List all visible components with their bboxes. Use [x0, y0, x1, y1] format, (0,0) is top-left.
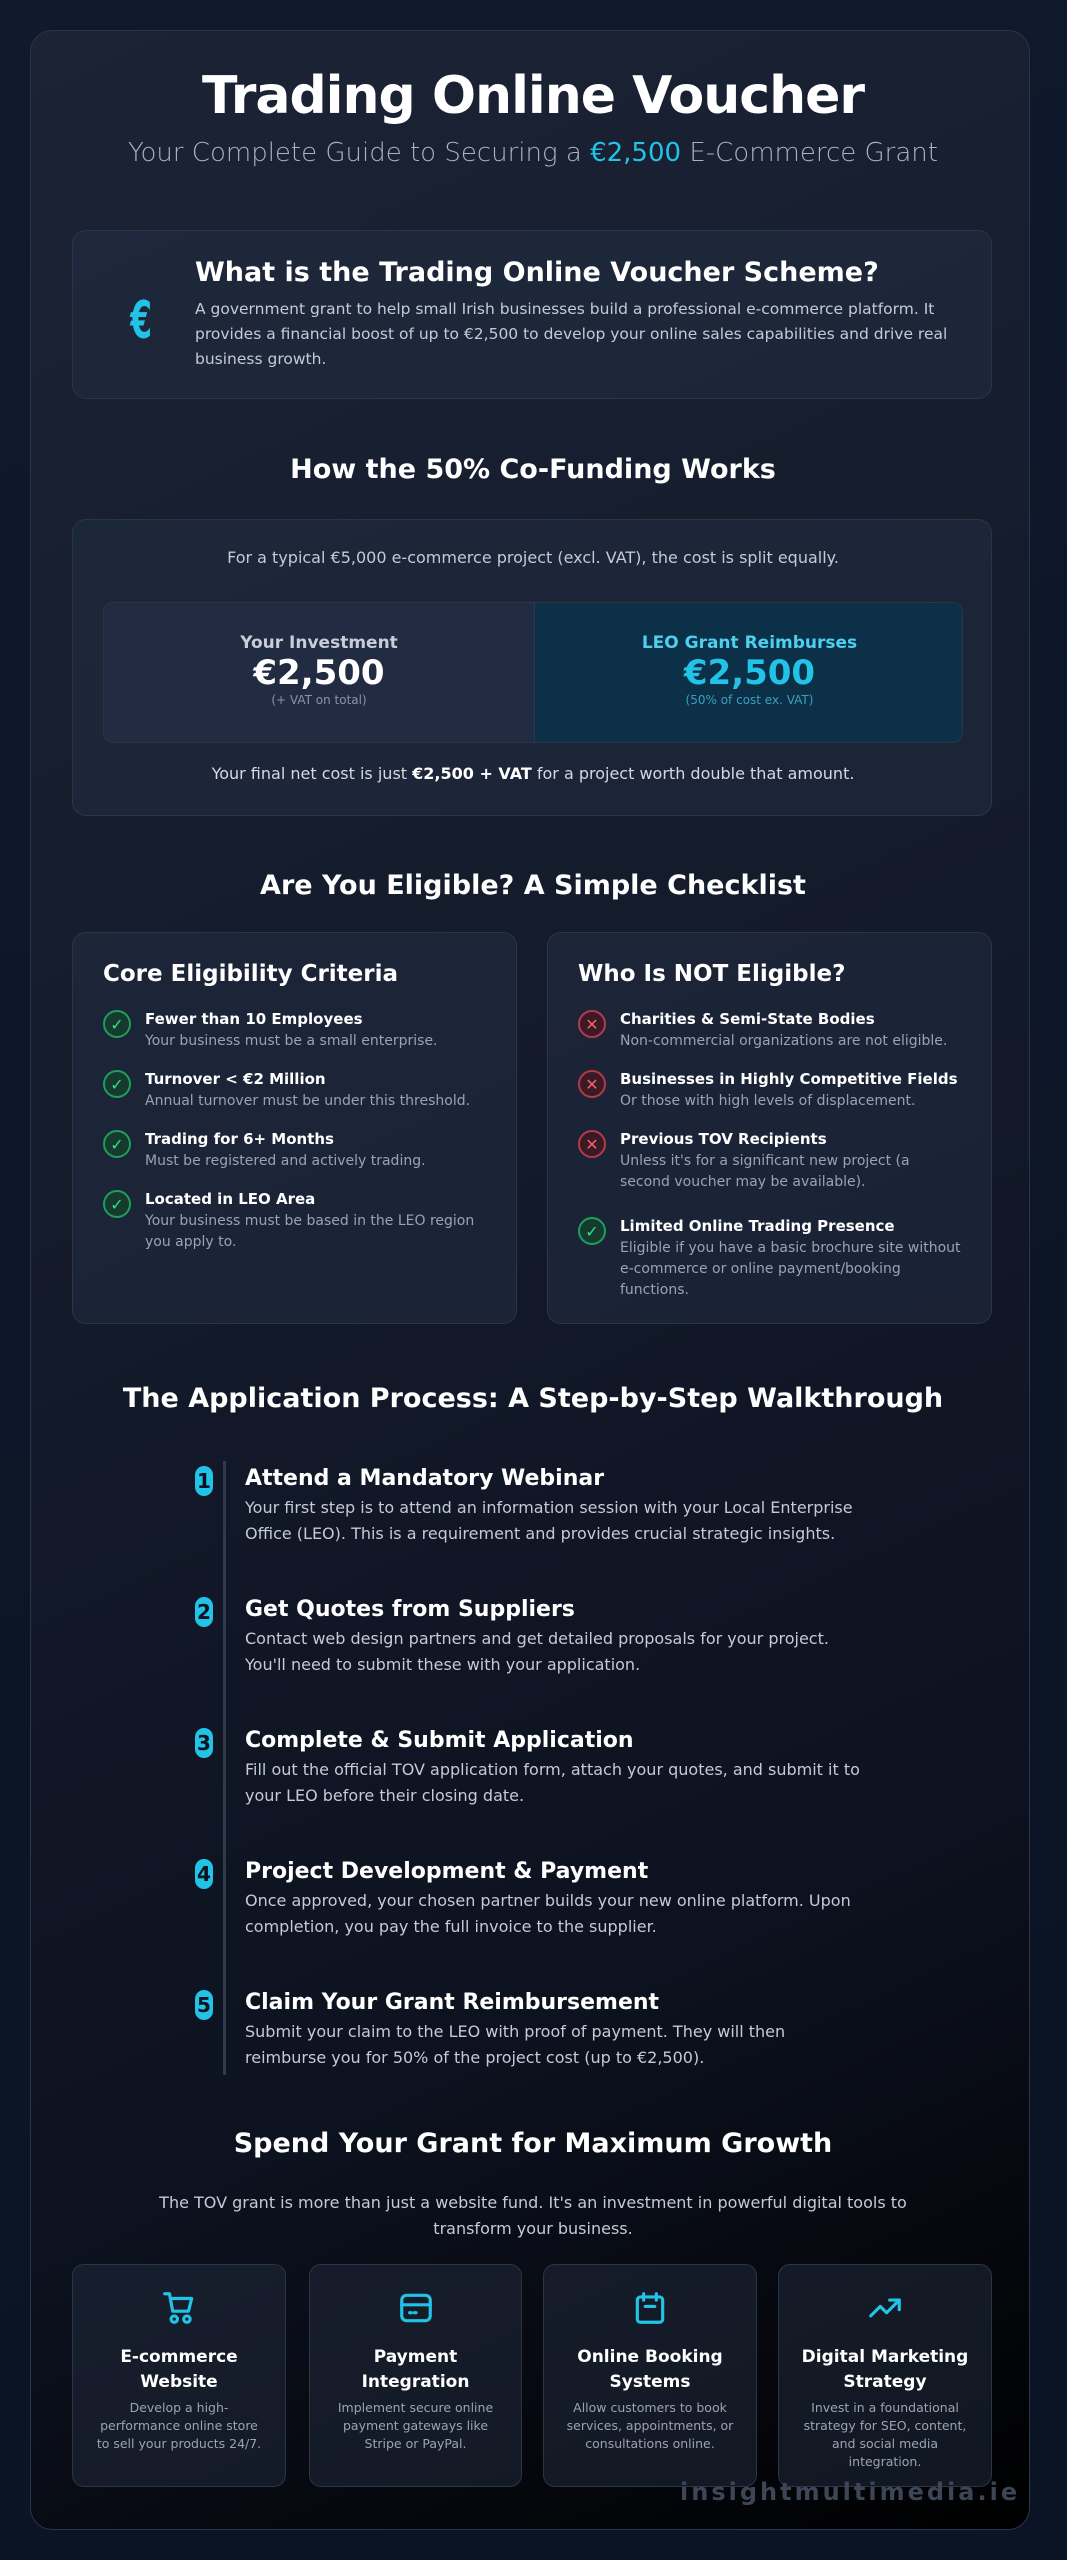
- item: Previous TOV Recipients: [620, 1130, 827, 1148]
- step 2: 2: [197, 1600, 211, 1624]
- step 3: 3: [197, 1731, 211, 1755]
- heading: Core Eligibility Criteria: [103, 961, 398, 987]
- item: Charities & Semi-State Bodies: [620, 1010, 875, 1028]
- card: marketing: Invest in a foundational strategy for SEO, content, and social media integration.: [804, 2400, 966, 2469]
- step 5: Claim Your Grant Reimbursement: [245, 1990, 659, 2015]
- timeline line: [223, 1461, 226, 2075]
- icon: card: [400, 2294, 432, 2322]
- card: payment: Payment: [374, 2347, 457, 2367]
- item: Businesses in Highly Competitive Fields: [620, 1070, 958, 1088]
- item: [578, 1130, 910, 1190]
- item: Or those with high levels of displacement.: [620, 1093, 915, 1109]
- item: ✕: [585, 1015, 599, 1034]
- item: Your business must be a small enterprise.: [145, 1033, 438, 1049]
- split bar: [103, 602, 963, 743]
- step 2: [195, 1597, 829, 1674]
- heading: Who Is NOT Eligible?: [578, 961, 845, 987]
- item: ✓: [110, 1135, 124, 1154]
- card: ecommerce: [72, 2264, 286, 2487]
- heading: what is: What is the Trading Online Voucher Scheme?: [195, 257, 879, 288]
- watermark: insightmultimedia.ie: [680, 2478, 1020, 2506]
- item: ✓: [110, 1195, 124, 1214]
- step 2: Get Quotes from Suppliers: [245, 1597, 575, 1622]
- item: ✓: [110, 1015, 124, 1034]
- your investment: €2,500: [253, 653, 385, 693]
- step 5: Submit your claim to the LEO with proof of payment. They will then reimburse you for 50% of the project cost (up to €2,500).: [245, 2022, 785, 2067]
- card: booking: Allow customers to book services, appointments, or consultations online.: [567, 2400, 733, 2451]
- item: ✕: [585, 1075, 599, 1094]
- card: payment: Integration: [362, 2372, 469, 2392]
- item: [103, 1070, 470, 1109]
- item: Annual turnover must be under this threshold.: [145, 1093, 470, 1109]
- card: ecommerce: Develop a high-performance online store to sell your products 24/7.: [97, 2400, 261, 2451]
- card: marketing: Strategy: [843, 2372, 927, 2392]
- icon: euro symbol: €: [130, 291, 152, 351]
- item: Eligible if you have a basic brochure site without e-commerce or online payment/booking functions.: [620, 1240, 961, 1298]
- item: ✓: [585, 1222, 599, 1241]
- item: Your business must be based in the LEO region you apply to.: [145, 1213, 474, 1250]
- step 4: Project Development & Payment: [245, 1859, 648, 1884]
- heading: eligibility: Are You Eligible? A Simple Checklist: [260, 870, 806, 901]
- heading: spend grant: Spend Your Grant for Maximum Growth: [234, 2128, 832, 2159]
- step 4: [195, 1859, 851, 1936]
- step 3: [195, 1728, 860, 1805]
- grant reimburses: (50% of cost ex. VAT): [686, 693, 813, 707]
- text: spend intro: The TOV grant is more than just a website fund. It's an investment in powerful digital tools to transform your business.: [159, 2193, 907, 2238]
- card: ecommerce: Website: [140, 2372, 218, 2392]
- card: booking: Systems: [610, 2372, 690, 2392]
- item: ✕: [585, 1135, 599, 1154]
- panel: not eligible: [547, 932, 992, 1324]
- step 4: 4: [197, 1862, 211, 1886]
- text: description: A government grant to help small Irish businesses build a professional e-commerce platform. It provides a financial boost of up to €2,500 to develop your online sales capabilities and drive real business growth.: [195, 300, 947, 368]
- text: intro: For a typical €5,000 e-commerce project (excl. VAT), the cost is split equally.: [227, 548, 839, 567]
- your investment: (+ VAT on total): [271, 693, 367, 707]
- step 3: Fill out the official TOV application form, attach your quotes, and submit it to your LEO before their closing date.: [245, 1760, 860, 1805]
- text: final cost: Your final net cost is just €2,500 + VAT for a project worth double that amount.: [212, 764, 854, 783]
- grant reimburses: [534, 603, 964, 744]
- item: Unless it's for a significant new project (a second voucher may be available).: [620, 1153, 910, 1190]
- item: [578, 1217, 961, 1298]
- item: Trading for 6+ Months: [145, 1130, 334, 1148]
- grant reimburses: LEO Grant Reimburses: [642, 633, 857, 653]
- icon: cart: [163, 2292, 194, 2324]
- item: Non-commercial organizations are not eligible.: [620, 1033, 947, 1049]
- item: Must be registered and actively trading.: [145, 1153, 426, 1169]
- item: [103, 1190, 474, 1250]
- step 2: Contact web design partners and get detailed proposals for your project.: [245, 1629, 829, 1648]
- item: [578, 1070, 958, 1109]
- item: Located in LEO Area: [145, 1190, 315, 1208]
- step 1: Your first step is to attend an information session with your Local Enterprise Office (LEO). This is a requirement and provides crucial strategic insights.: [245, 1498, 853, 1543]
- step 2: You'll need to submit these with your application.: [245, 1655, 640, 1674]
- item: [103, 1010, 438, 1049]
- subtitle: Your Complete Guide to Securing a €2,500 E-Commerce Grant: [128, 138, 938, 168]
- item: Turnover < €2 Million: [145, 1070, 326, 1088]
- step 1: [195, 1466, 853, 1543]
- step 1: 1: [197, 1469, 211, 1493]
- item: [578, 1010, 947, 1049]
- step 4: Once approved, your chosen partner builds your new online platform. Upon completion, you pay the full invoice to the supplier.: [245, 1891, 851, 1936]
- card: marketing: [778, 2264, 992, 2487]
- grant reimburses: €2,500: [684, 653, 815, 693]
- icon: trend: [869, 2298, 901, 2318]
- item: Fewer than 10 Employees: [145, 1010, 363, 1028]
- step 1: Attend a Mandatory Webinar: [245, 1466, 604, 1491]
- icon: calendar: [636, 2292, 664, 2324]
- panel: co-funding: [72, 519, 992, 816]
- card: marketing: Digital Marketing: [802, 2347, 968, 2367]
- title: Trading Online Voucher: [202, 66, 864, 126]
- heading: application process: The Application Process: A Step-by-Step Walkthrough: [123, 1383, 943, 1414]
- panel: what is: [72, 230, 992, 399]
- card: payment: [309, 2264, 522, 2487]
- item: [103, 1130, 426, 1169]
- step 5: 5: [197, 1993, 211, 2017]
- item: ✓: [110, 1075, 124, 1094]
- your investment: Your Investment: [240, 633, 398, 653]
- card: ecommerce: E-commerce: [120, 2347, 238, 2367]
- card: booking: [543, 2264, 757, 2487]
- item: Limited Online Trading Presence: [620, 1217, 895, 1235]
- heading: co-funding: How the 50% Co-Funding Works: [290, 454, 776, 485]
- your investment: [104, 603, 534, 744]
- card: booking: Online Booking: [577, 2347, 723, 2367]
- card: payment: Implement secure online payment gateways like Stripe or PayPal.: [338, 2400, 493, 2451]
- panel: core criteria: [72, 932, 517, 1324]
- step 3: Complete & Submit Application: [245, 1728, 634, 1753]
- step 5: [195, 1990, 785, 2067]
